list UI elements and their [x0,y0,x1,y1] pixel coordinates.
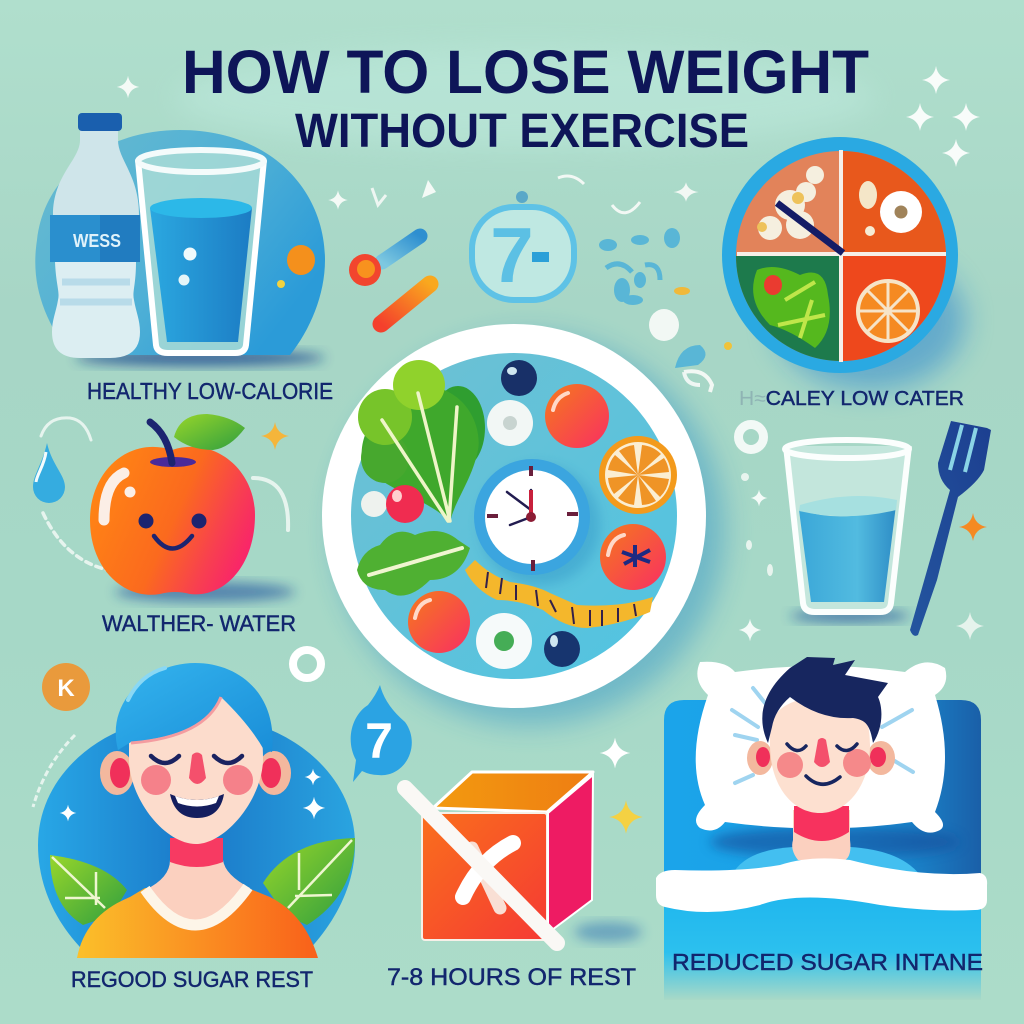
ears [747,741,895,775]
label: healthy low cater: H≈CALEY LOW CATER [739,388,964,410]
decorative arcs [41,418,288,570]
icon: stopwatch 7 [472,191,574,300]
sparkles right [739,473,987,641]
icon: right glass of water [785,440,910,622]
icon: water bottle and glass [35,113,325,366]
icon: measuring tape [465,560,653,628]
icon: clock [474,459,600,585]
glass [138,150,264,353]
icon: divided meal plate [722,137,965,390]
title: WITHOUT EXERCISE [295,105,749,158]
icon: fork [910,421,991,636]
title: HOW TO LOSE WEIGHT [182,38,869,106]
label: reduced sugar intake: REDUCED SUGAR INTANE [672,949,983,975]
sparkles center bottom [600,738,643,834]
label: healthy low-calorie: HEALTHY LOW-CALORIE [87,378,333,404]
icon: ring [738,424,764,450]
icon: smiling apple [90,414,295,602]
label: 7-8 hours of rest: 7-8 HOURS OF REST [387,964,636,991]
decorative particles [558,176,732,392]
icon: lettuce [358,360,485,522]
icon: speech bubble 7: 7 [365,713,393,769]
sparkle: orange [261,422,289,450]
badge: orange circle: K [57,675,75,702]
bottle: WESS [73,231,121,251]
bottle [50,113,140,358]
decorative bead arc [33,735,75,807]
label: water: WALTHER- WATER [102,611,296,636]
icon: sleeping man in bed [656,657,987,1000]
central plate [322,324,725,725]
title [182,38,869,158]
badge: orange circle [42,663,90,711]
icon: stopwatch 7: 7 [490,211,534,299]
icon: happy woman [38,663,355,958]
ears [100,751,291,795]
icon: speech bubble 7 [351,685,412,782]
icon: water drop [33,443,65,503]
sparkles top right [906,66,980,167]
icon: crossed sugar cube [405,772,642,943]
label: regood sugar rest: REGOOD SUGAR REST [71,967,313,992]
plate food [753,166,922,348]
sparkles top left [117,76,436,210]
icon: foods around plate [357,360,677,669]
icon: white ring [293,650,321,678]
icon: spoons [349,236,430,324]
